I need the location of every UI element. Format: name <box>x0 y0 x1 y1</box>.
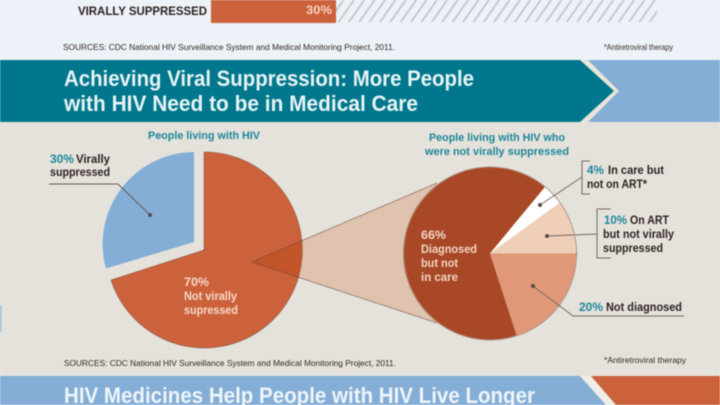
banner blue tail <box>580 60 720 122</box>
heading: not virally suppressed group: People living with HIV who <box>429 132 565 144</box>
banner blue arrow <box>0 376 606 405</box>
slice: 10 percent on ART <box>490 203 576 254</box>
callout text: 4% <box>587 165 604 177</box>
leader line <box>49 184 150 215</box>
sources note: bottom: SOURCES: CDC National HIV Surveillance System and Medical Monitoring Project, 2011. <box>64 358 396 368</box>
banner chevron divider <box>578 376 616 405</box>
label: 70 percent: supressed <box>184 305 238 317</box>
callout: 20 percent <box>531 284 684 316</box>
chart: right pie <box>404 167 576 340</box>
banner: HIV medicines <box>0 376 720 405</box>
bracket and leader <box>547 209 611 258</box>
banner teal arrow <box>0 60 614 122</box>
banner orange tail <box>585 376 720 405</box>
slice: 66 percent diagnosed but not in care <box>404 168 545 340</box>
label: 66 percent: Diagnosed <box>421 244 477 256</box>
bar label: virally suppressed: VIRALLY SUPPRESSED <box>78 6 207 18</box>
slice: 30 percent virally suppressed <box>103 152 194 268</box>
callout text: 20% <box>579 302 603 314</box>
banner: achieving viral suppression <box>0 60 720 122</box>
callout text: but not virally <box>603 229 675 241</box>
cone outline <box>252 183 437 323</box>
callout text: 10% <box>604 215 627 227</box>
main panel background <box>0 122 720 376</box>
label: 66 percent: in care <box>421 272 458 284</box>
callout text: not on ART* <box>587 179 647 191</box>
heading: people living with HIV: People living with HIV <box>148 130 261 142</box>
callout: 10 percent <box>545 209 677 258</box>
label: 66 percent: 66% <box>421 230 446 242</box>
bar: 30 percent <box>211 0 336 23</box>
bar track: hatched remainder <box>336 0 657 22</box>
banner title: with HIV Need to be in Medical Care <box>63 91 418 116</box>
leader dot <box>545 234 549 238</box>
bracket and leader <box>540 161 590 205</box>
bar value: 30% <box>306 5 332 17</box>
callout text: suppressed <box>603 243 663 255</box>
callout: 4 percent <box>538 161 667 207</box>
label: 66 percent: but not <box>421 258 458 270</box>
sources note: top: SOURCES: CDC National HIV Surveillance System and Medical Monitoring Project, 2011. <box>63 42 395 52</box>
label: 70 percent: Not virally <box>184 291 238 303</box>
callout: 30 percent virally suppressed <box>49 154 152 217</box>
callout text: On ART <box>630 215 669 227</box>
banner title: Achieving Viral Suppression: More People <box>64 66 474 91</box>
leader dot <box>538 203 542 207</box>
leader line <box>533 286 684 316</box>
callout text: Virally <box>76 154 111 166</box>
pie outline <box>404 167 576 340</box>
cone overlap on pie <box>254 242 302 276</box>
callout text: suppressed <box>50 167 110 179</box>
callout text: 30% <box>50 154 74 166</box>
footnote: top: *Antiretroviral therapy <box>604 42 674 52</box>
footnote: bottom: *Antiretroviral therapy <box>604 355 687 365</box>
leader dot <box>148 213 152 217</box>
slice: 70 percent not virally suppressed <box>111 152 302 348</box>
slice: 20 percent not diagnosed <box>490 254 576 335</box>
panel: top bar chart remnant <box>78 0 657 23</box>
leader dot <box>531 284 535 288</box>
callout text: Not diagnosed <box>606 302 682 314</box>
callout text: In care but <box>608 165 664 177</box>
connector cone <box>252 183 437 323</box>
banner chevron divider <box>578 60 619 122</box>
label: 70 percent: 70% <box>184 277 209 289</box>
slice: 4 percent in care not on ART <box>490 187 560 254</box>
left edge tick <box>0 305 2 332</box>
heading: not virally suppressed group: were not virally suppressed <box>424 146 569 158</box>
chart: left pie <box>103 152 437 348</box>
